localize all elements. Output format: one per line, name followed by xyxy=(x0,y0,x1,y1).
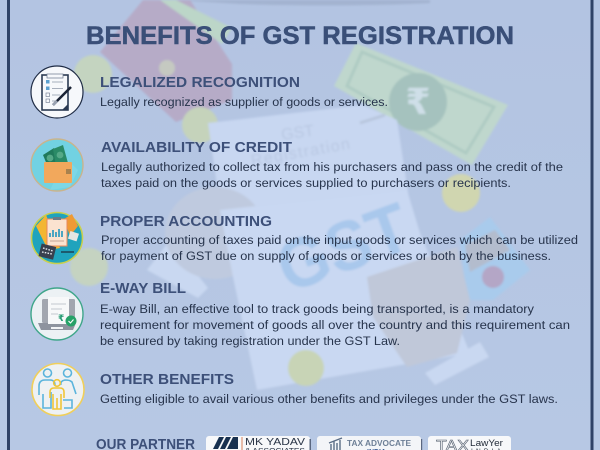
description: Getting eligible to avail various other benefits and privileges under the GST laws. xyxy=(100,392,558,406)
partner logo: Tax Advocate India: TAX ADVOCATE xyxy=(347,438,411,448)
description: be ensured by taking registration under the GST Law. xyxy=(100,334,400,348)
item: legalized recognition xyxy=(31,66,388,118)
icon: family xyxy=(32,364,84,416)
heading: PROPER ACCOUNTING xyxy=(100,214,272,230)
description: E-way Bill, an effective tool to track goods being transported, is a mandatory xyxy=(100,302,535,316)
partner logo: Tax Lawyer India: LawYer xyxy=(470,438,503,449)
description xyxy=(100,302,570,348)
partner logo: MK Yadav and Associates xyxy=(206,436,311,450)
background illustration: GST registration: ₹ xyxy=(405,82,431,123)
item: proper accounting xyxy=(32,212,578,264)
icon: checklist and pen xyxy=(31,66,83,118)
heading: AVAILABILITY OF CREDIT xyxy=(101,140,292,156)
background illustration: GST registration: Registration xyxy=(250,136,351,170)
partner logo: Tax Lawyer India xyxy=(428,436,511,450)
background illustration: GST registration xyxy=(70,0,530,390)
heading: LEGALIZED RECOGNITION xyxy=(100,75,300,91)
title: BENEFITS OF GST REGISTRATION xyxy=(86,22,514,50)
description: requirement for movement of goods all over the country and this requirement can xyxy=(100,318,570,332)
left border line xyxy=(7,0,10,450)
item: e-way bill xyxy=(31,281,570,348)
heading: E-WAY BILL xyxy=(100,281,186,297)
description: Proper accounting of taxes paid on the input goods or services which can be utilized xyxy=(101,233,578,247)
description: for payment of GST due on supply of goods or services or both by the business. xyxy=(101,249,551,263)
description xyxy=(101,233,578,263)
partner logo: Tax Advocate India xyxy=(317,436,422,450)
background illustration: GST registration: GST xyxy=(280,123,315,144)
right border line xyxy=(590,0,594,450)
item: other benefits xyxy=(32,364,558,416)
description: Legally recognized as supplier of goods or services. xyxy=(100,95,388,109)
item: availability of credit xyxy=(31,139,563,191)
description: taxes paid on the goods or services supplied to purchasers or recipients. xyxy=(101,176,511,190)
icon: accounting clipboard and calculator xyxy=(32,212,82,264)
heading: OTHER BENEFITS xyxy=(100,372,234,388)
icon: wallet with cash xyxy=(31,139,83,191)
icon: laptop with bill: ₹ xyxy=(58,314,64,324)
partner logo: MK Yadav and Associates: MK YADAV xyxy=(245,437,305,448)
icon: laptop with bill xyxy=(31,288,83,340)
description xyxy=(101,160,563,190)
description: Legally authorized to collect tax from his purchasers and pass on the credit of the xyxy=(101,160,563,174)
background illustration: GST registration: GST xyxy=(266,188,420,307)
